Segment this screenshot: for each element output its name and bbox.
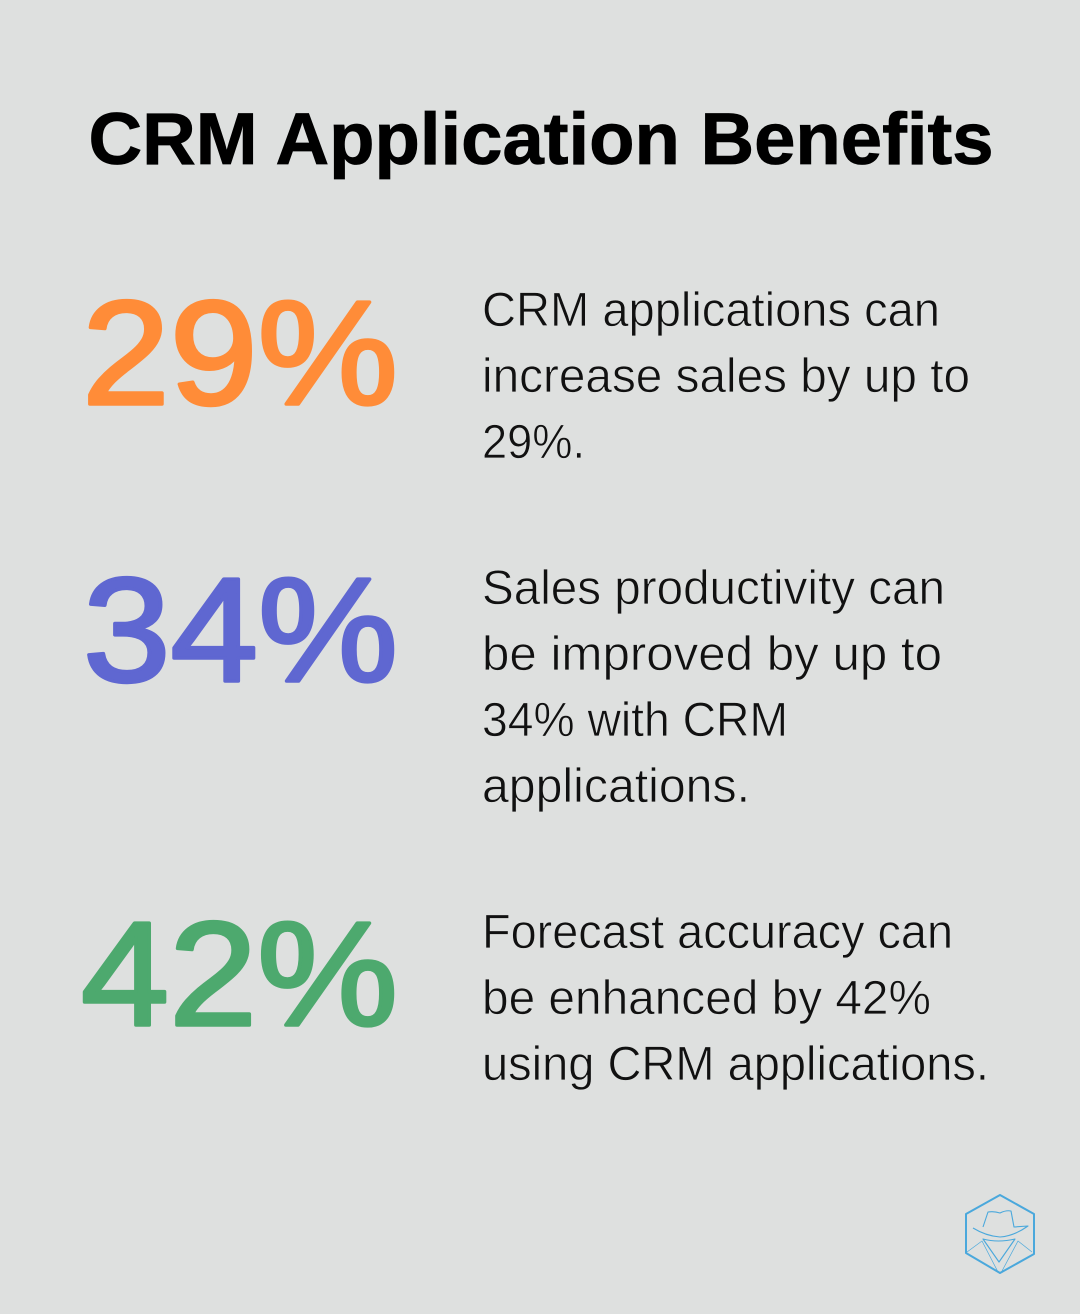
title: CRM Application Benefits <box>88 99 994 180</box>
text block: forecast description: be enhanced by 42% <box>482 972 931 1025</box>
text block: sales description <box>482 284 970 469</box>
icon: hexagon logo with hat figure <box>966 1195 1034 1273</box>
text block: productivity description: applications. <box>482 760 750 813</box>
text block: productivity description: Sales productivity can <box>482 562 945 615</box>
stat: 42%: 42% <box>81 892 398 1057</box>
text block: productivity description: 34% with CRM <box>482 694 788 747</box>
panel: sales statistic <box>82 271 970 469</box>
text block: forecast description: using CRM applications. <box>482 1038 989 1091</box>
text block: productivity description <box>482 562 945 813</box>
panel: forecast statistic <box>81 892 989 1091</box>
text block: productivity description: be improved by up to <box>482 628 942 681</box>
stat: 34%: 34% <box>83 548 398 713</box>
text block: forecast description: Forecast accuracy can <box>482 906 953 959</box>
text block: sales description: increase sales by up to <box>482 350 970 403</box>
text block: forecast description <box>482 906 989 1091</box>
stat: 29%: 29% <box>82 271 398 436</box>
panel: productivity statistic <box>83 548 945 813</box>
text block: sales description: 29%. <box>482 416 585 469</box>
text block: sales description: CRM applications can <box>482 284 940 337</box>
